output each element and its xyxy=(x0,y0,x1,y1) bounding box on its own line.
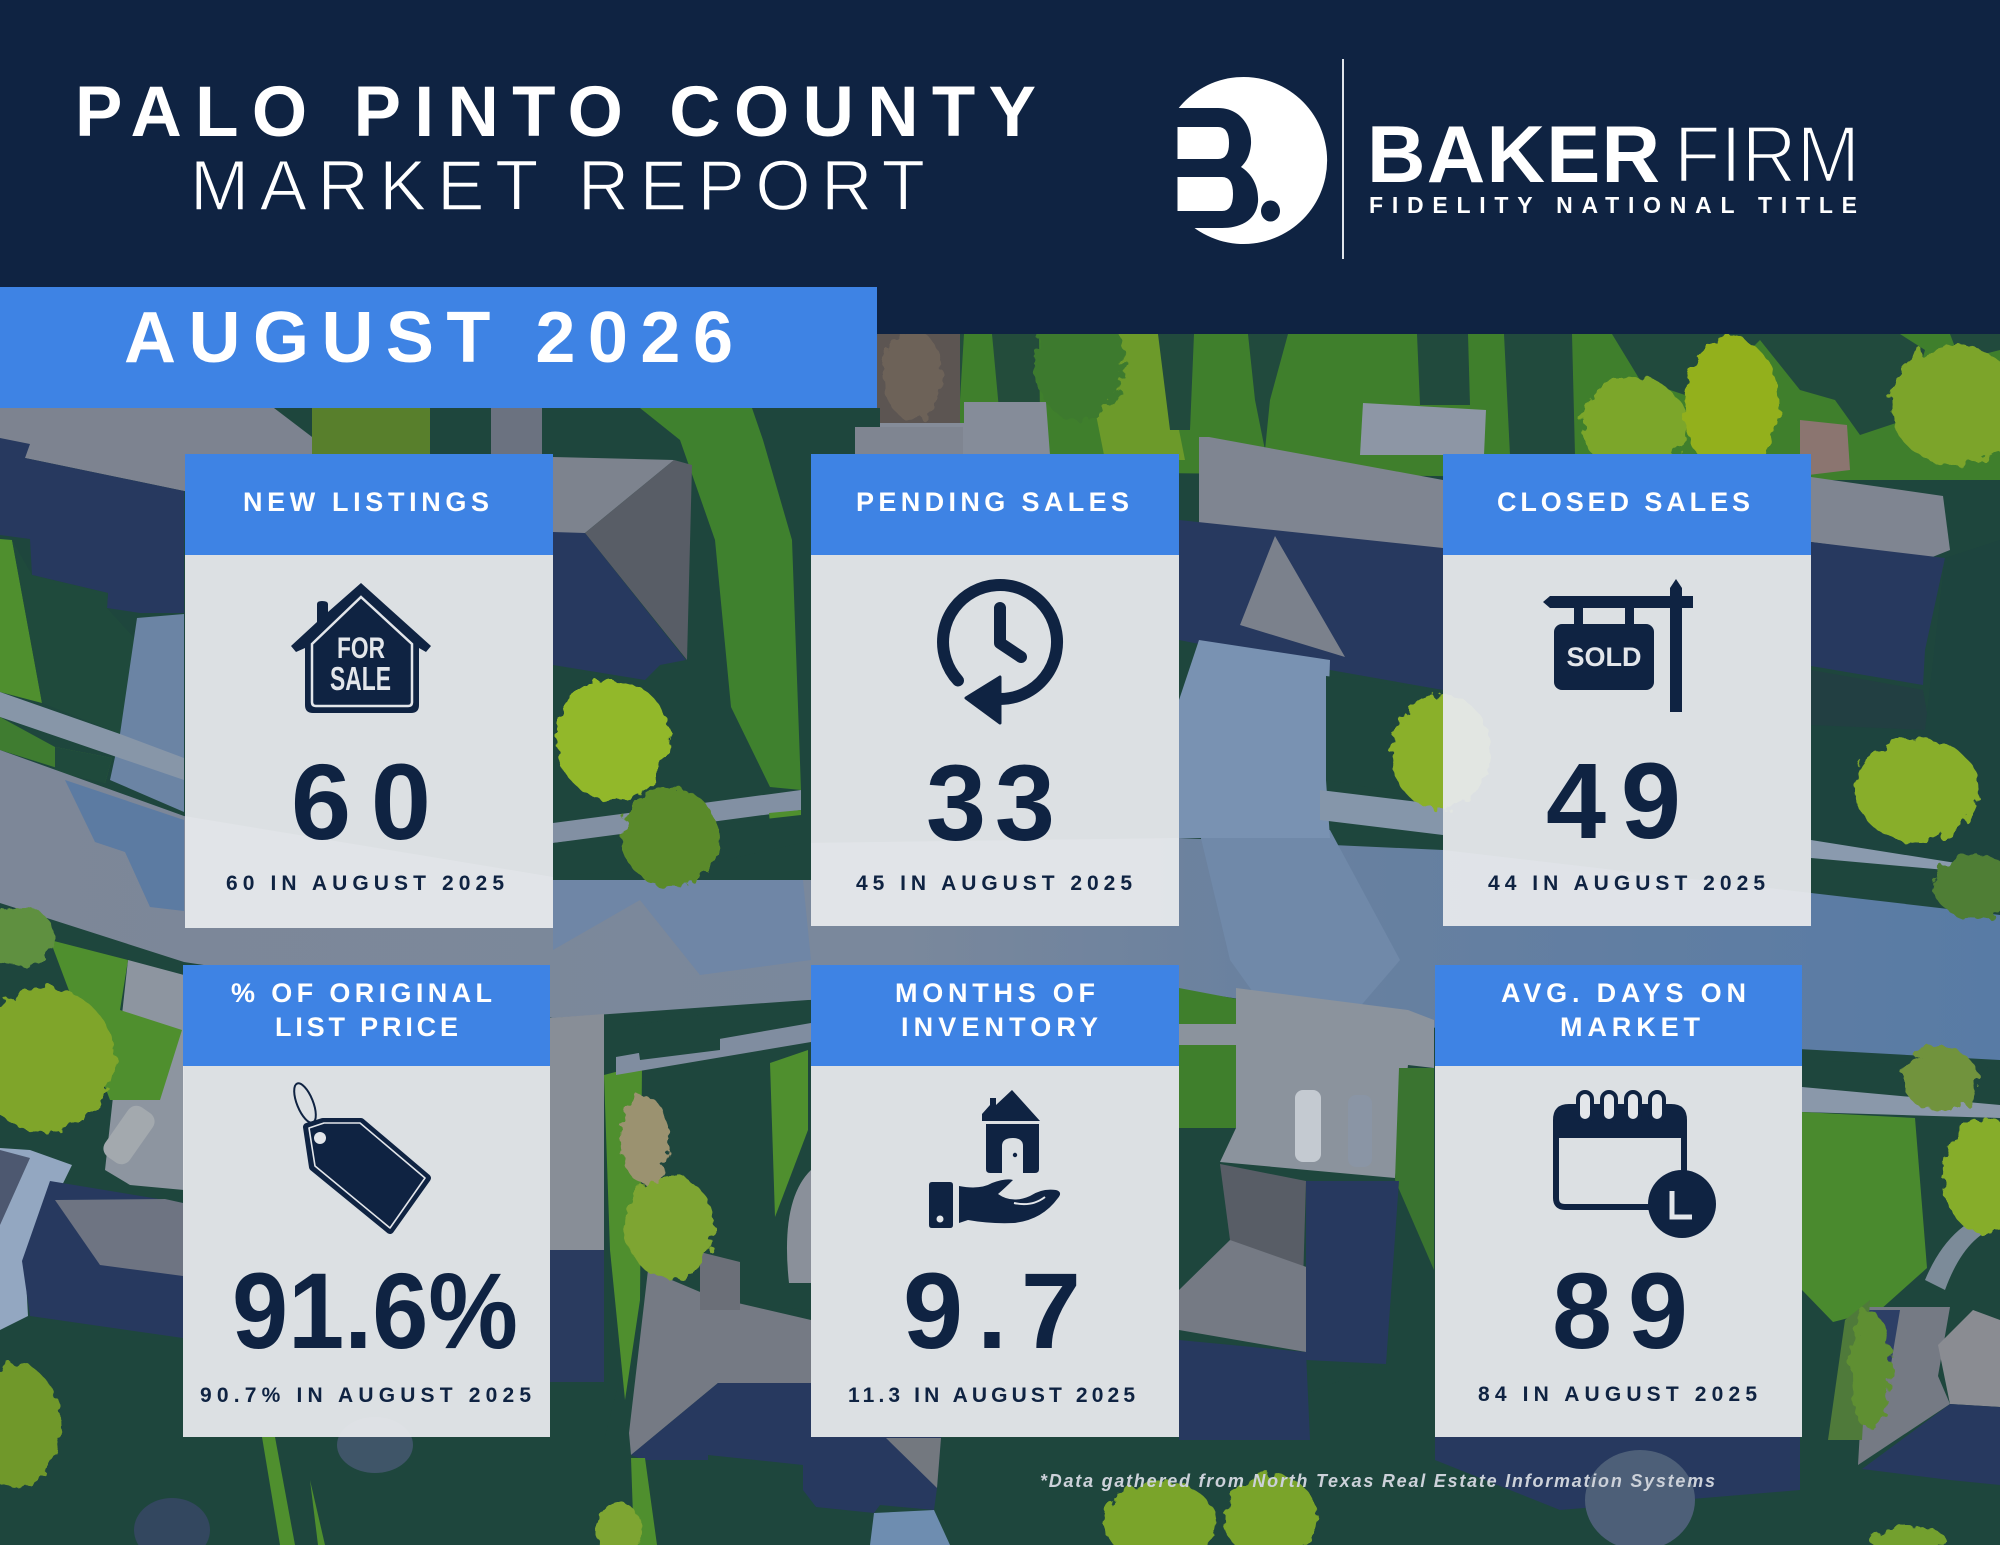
title line: market report: MARKET REPORT xyxy=(190,147,925,226)
date banner: AUGUST 2026 xyxy=(124,298,733,378)
value: 9.7 xyxy=(903,1250,1081,1371)
comparison: 60 IN AUGUST 2025 xyxy=(226,872,504,895)
heading xyxy=(1501,978,1746,1042)
icon: clock with arrow xyxy=(943,585,1057,723)
logo wordmark: FIRM xyxy=(1674,110,1860,200)
logo divider xyxy=(1342,59,1344,259)
comparison: 45 IN AUGUST 2025 xyxy=(856,872,1132,895)
date banner xyxy=(0,287,877,408)
heading: INVENTORY xyxy=(901,1012,1098,1042)
heading: MONTHS OF xyxy=(895,978,1095,1008)
header band xyxy=(0,0,2000,334)
heading xyxy=(231,978,492,1042)
logo mark: B circle xyxy=(1150,77,1327,244)
lower right middle house and driveway xyxy=(1179,988,1242,1024)
logo wordmark xyxy=(1367,110,1860,218)
heading: PENDING SALES xyxy=(856,487,1129,517)
footnote: *Data gathered from North Texas Real Estate Information Systems xyxy=(1040,1471,1715,1491)
icon: sold sign: SOLD xyxy=(1566,642,1642,672)
comparison: 90.7% IN AUGUST 2025 xyxy=(200,1384,531,1407)
icon: sold sign xyxy=(1543,579,1693,712)
heading: AVG. DAYS ON xyxy=(1501,978,1746,1008)
icon: calendar with clock xyxy=(1553,1092,1716,1238)
comparison: 11.3 IN AUGUST 2025 xyxy=(848,1384,1135,1407)
road xyxy=(0,750,2000,1060)
icon: for sale house: SALE xyxy=(330,660,391,697)
heading: LIST PRICE xyxy=(275,1012,458,1042)
middle gap between card 1 and 2 xyxy=(553,408,880,880)
heading: % OF ORIGINAL xyxy=(231,978,492,1008)
comparison: 44 IN AUGUST 2025 xyxy=(1488,872,1765,895)
heading: CLOSED SALES xyxy=(1497,487,1750,517)
lower right xyxy=(1802,1060,2000,1090)
value: 89 xyxy=(1552,1250,1688,1371)
lower middle gap xyxy=(550,1014,604,1250)
comparison: 84 IN AUGUST 2025 xyxy=(1478,1383,1757,1406)
panel: pending sales xyxy=(811,454,1179,926)
value: 91.6% xyxy=(232,1250,518,1371)
right of card 3 xyxy=(1811,477,1950,558)
lower left xyxy=(105,960,184,1190)
value: 33 xyxy=(926,742,1055,863)
title line: county name: PALO PINTO COUNTY xyxy=(75,73,1036,152)
panel: closed sales xyxy=(1443,454,1811,926)
centre house between card 2 and 3 xyxy=(1179,520,1443,690)
icon: price tag xyxy=(290,1081,427,1230)
icon: for sale house xyxy=(291,583,431,713)
panel: months of inventory xyxy=(811,965,1179,1437)
icon: house in hand xyxy=(929,1090,1060,1228)
left house upper xyxy=(0,408,316,500)
panel: percent of original list price xyxy=(183,965,550,1437)
panel: average days on market xyxy=(1435,965,1802,1437)
logo wordmark: FIDELITY NATIONAL TITLE xyxy=(1369,192,1857,218)
logo wordmark: BAKER xyxy=(1367,110,1660,200)
heading xyxy=(895,978,1098,1042)
heading: NEW LISTINGS xyxy=(243,487,489,517)
panel: new listings xyxy=(185,454,553,928)
logo xyxy=(1150,59,1860,259)
title xyxy=(75,73,1036,226)
car left xyxy=(100,1102,158,1168)
value: 60 xyxy=(291,741,431,862)
heading: MARKET xyxy=(1560,1012,1700,1042)
value: 49 xyxy=(1546,740,1681,861)
icon: for sale house: FOR xyxy=(337,632,385,665)
